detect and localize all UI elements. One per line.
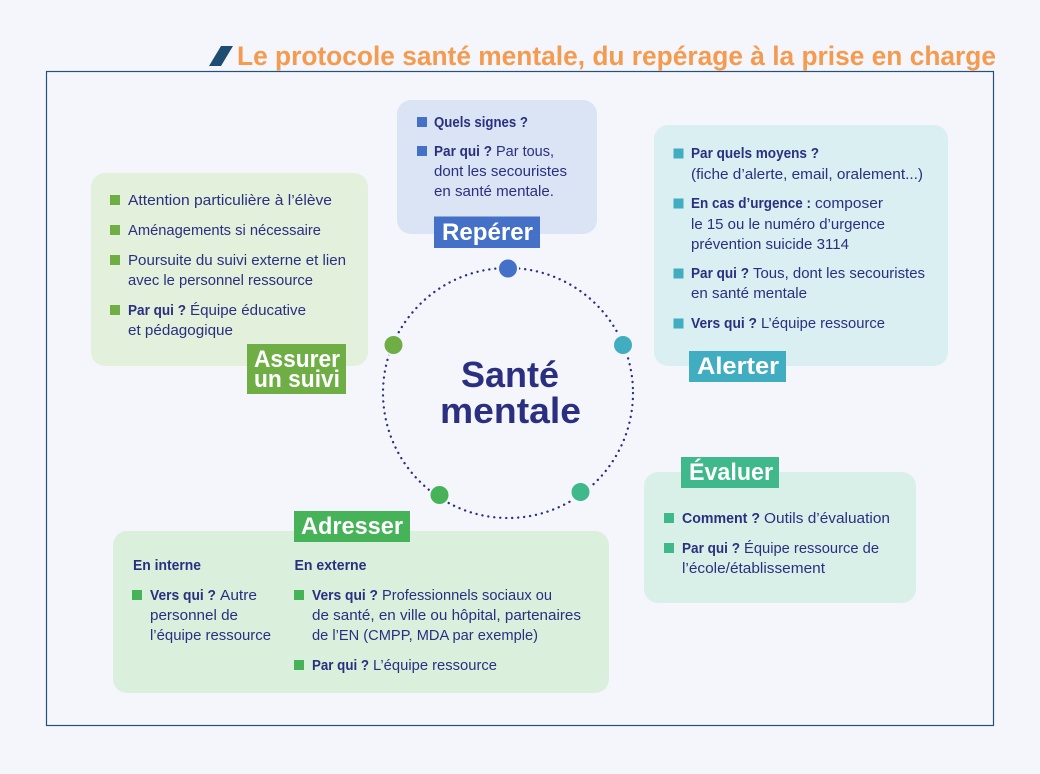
label: Évaluer [689,458,773,486]
panel: assurer un suivi [91,173,368,394]
label: Alerter [697,353,779,380]
text: Vers qui ? [312,588,378,604]
text [312,588,581,644]
text: Par qui ? [682,541,740,557]
icon: slash [209,46,233,66]
heading: en externe: En externe [294,558,366,574]
text: L’équipe ressource [761,316,885,332]
text: dont les secouristes [434,164,567,180]
label [689,351,786,382]
bullet [294,590,304,600]
text [150,588,271,644]
text: Aménagements si nécessaire [128,223,321,239]
text: Attention particulière à l’élève [128,193,332,209]
node: assurer un suivi [384,336,402,354]
text: Poursuite du suivi externe et lien [128,253,346,269]
bullet [132,590,142,600]
center title: Santé [461,354,559,395]
text: le 15 ou le numéro d’urgence [691,217,885,233]
panel: alerter [654,125,948,382]
node: alerter [614,336,632,354]
text: Autre [220,588,257,604]
text: Par qui ? [434,144,492,160]
text: avec le personnel ressource [128,273,313,289]
text: Par quels moyens ? [691,146,819,162]
label: Assurer [254,346,340,373]
text [312,658,497,674]
center title: mentale [440,390,581,431]
bullet [674,148,684,158]
bullet [417,117,427,127]
bullet [417,146,427,156]
diagram: dotted circle [383,260,633,518]
text: Comment ? [682,511,760,527]
text [691,146,923,183]
text: l’équipe ressource [150,628,271,644]
frame [46,72,994,726]
bullet [664,513,674,523]
text: Équipe éducative [190,302,306,319]
label: Repérer [442,219,533,246]
title [209,41,996,71]
text: de l’EN (CMPP, MDA par exemple) [312,628,538,644]
text [691,266,925,302]
node: adresser [430,486,448,504]
node: repérer [499,260,517,278]
text: en santé mentale. [434,184,554,200]
text: de santé, en ville ou hôpital, partenaires [312,608,581,624]
text: prévention suicide 3114 [691,237,849,253]
text: Professionnels sociaux ou [382,588,552,604]
node: évaluer [572,483,590,501]
bullet [110,225,120,235]
bullet [294,660,304,670]
text [682,540,879,577]
text: Vers qui ? [150,588,216,604]
text: En cas d’urgence : [691,196,811,212]
panel: adresser [113,511,609,693]
text: Équipe ressource de [744,540,879,557]
text [128,253,346,289]
bullet [674,318,684,328]
text [691,196,885,253]
text: Par tous, [496,144,554,160]
label: Adresser [301,513,403,540]
text [682,511,890,527]
panel: évaluer [644,457,916,603]
text [691,316,885,332]
text: en santé mentale [691,286,807,302]
label [247,344,346,394]
bullet [674,268,684,278]
bullet [110,255,120,265]
bullet [110,305,120,315]
title text: Le protocole santé mentale, du repérage à la prise en charge [237,41,996,71]
text: Par qui ? [128,303,186,319]
label: un suivi [254,366,340,393]
bullet [674,198,684,208]
text: (fiche d’alerte, email, oralement...) [691,167,923,183]
text [434,144,567,200]
text: et pédagogique [128,323,233,339]
text: composer [815,196,883,212]
bullet [110,195,120,205]
panel: repérer [397,100,597,248]
text: l’école/établissement [682,561,825,577]
text: Tous, dont les secouristes [753,266,925,282]
text: Outils d’évaluation [764,511,890,527]
text: personnel de [150,608,238,624]
center title [440,354,581,431]
bullet [664,543,674,553]
text: Vers qui ? [691,316,757,332]
text: Quels signes ? [434,115,528,131]
text: Par qui ? [312,658,369,674]
text: L’équipe ressource [373,658,497,674]
text: Par qui ? [691,266,749,282]
heading: en interne: En interne [133,558,201,574]
text [128,302,306,339]
